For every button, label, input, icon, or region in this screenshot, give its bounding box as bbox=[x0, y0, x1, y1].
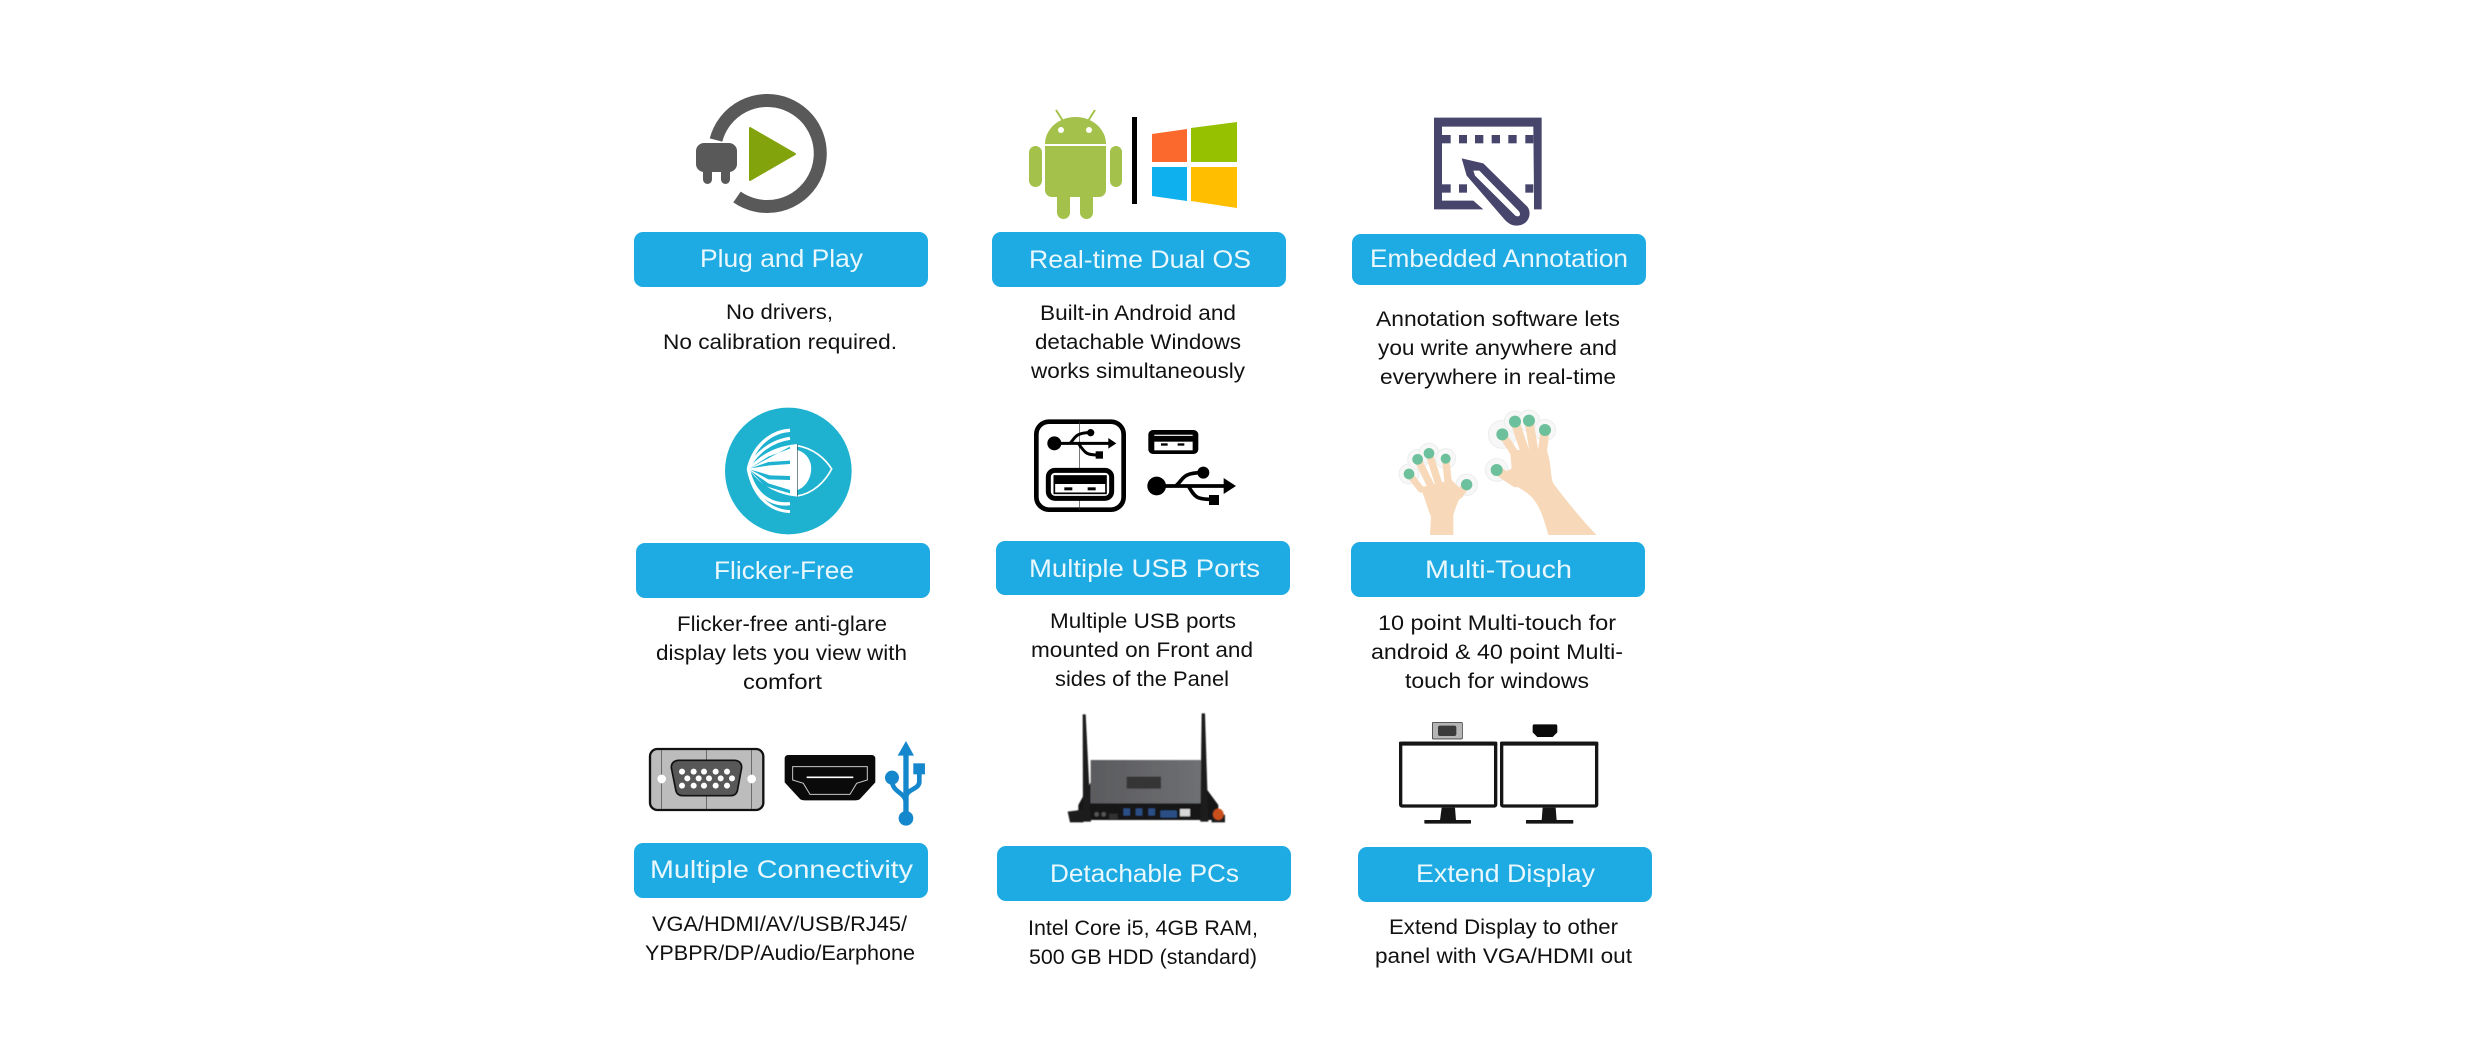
heading: Multi-Touch: Multi-Touch bbox=[1425, 556, 1572, 584]
heading: Flicker-Free bbox=[636, 543, 930, 598]
text: Annotation description: everywhere in real-time bbox=[1380, 366, 1616, 389]
heading: Multiple Connectivity bbox=[634, 843, 928, 898]
heading: Detachable PCs bbox=[997, 846, 1291, 901]
heading: Real-time Dual OS: Real-time Dual OS bbox=[1029, 246, 1251, 274]
icon: detachable PC module bbox=[1068, 713, 1225, 822]
text: Multi-Touch description: 10 point Multi-touch for bbox=[1378, 612, 1616, 635]
icon: VGA, HDMI and USB connectors bbox=[650, 741, 925, 826]
text: Annotation description bbox=[1376, 308, 1620, 389]
text: Extend Display description bbox=[1375, 916, 1632, 968]
heading: Plug and Play: Plug and Play bbox=[700, 245, 864, 273]
heading: Real-time Dual OS bbox=[992, 232, 1286, 287]
text: Detachable PC description: Intel Core i5, 4GB RAM, bbox=[1028, 917, 1258, 940]
text: Extend Display description: panel with VGA/HDMI out bbox=[1375, 945, 1632, 968]
icon: annotation film and pen bbox=[1434, 118, 1542, 226]
text: Plug and Play description: No drivers, bbox=[726, 301, 833, 324]
text: Annotation description: Annotation software lets bbox=[1376, 308, 1620, 331]
heading: Embedded Annotation bbox=[1352, 234, 1646, 285]
icon: two monitors with connectors bbox=[1399, 722, 1598, 824]
icon: plug and play bbox=[696, 100, 820, 206]
text: USB description: sides of the Panel bbox=[1055, 668, 1229, 691]
heading: Extend Display bbox=[1358, 847, 1652, 902]
panel: Multiple USB Ports bbox=[996, 421, 1290, 691]
text: Detachable PC description: 500 GB HDD (standard) bbox=[1029, 946, 1257, 969]
text: Dual OS description bbox=[1030, 302, 1246, 383]
heading: Extend Display: Extend Display bbox=[1416, 860, 1596, 888]
text: Dual OS description: Built-in Android and bbox=[1040, 302, 1236, 325]
text: Connectivity description bbox=[645, 913, 915, 965]
text: Detachable PC description bbox=[1028, 917, 1258, 969]
heading: Plug and Play bbox=[634, 232, 928, 287]
text: Dual OS description: works simultaneously bbox=[1030, 360, 1246, 383]
text: Flicker-Free description: display lets you view with bbox=[656, 642, 907, 665]
text: Annotation description: you write anywhere and bbox=[1378, 337, 1617, 360]
text: Flicker-Free description: comfort bbox=[743, 671, 822, 694]
icon: Android and Windows logos bbox=[1029, 110, 1237, 219]
icon: flicker-free eye bbox=[725, 408, 852, 534]
text: Multi-Touch description bbox=[1371, 612, 1623, 693]
icon: USB ports and symbols bbox=[1036, 421, 1236, 510]
text: Connectivity description: YPBPR/DP/Audio/Earphone bbox=[645, 942, 915, 965]
heading: Multiple USB Ports bbox=[996, 541, 1290, 595]
text: USB description bbox=[1031, 610, 1253, 691]
text: Flicker-Free description bbox=[656, 613, 907, 694]
heading: Multiple Connectivity: Multiple Connectivity bbox=[650, 856, 914, 884]
panel: Plug and Play bbox=[634, 100, 928, 354]
text: Plug and Play description bbox=[663, 301, 897, 354]
icon: hands with touch points bbox=[1399, 410, 1597, 535]
panel: Detachable PCs bbox=[997, 713, 1291, 969]
text: Connectivity description: VGA/HDMI/AV/USB/RJ45/ bbox=[652, 913, 907, 936]
heading: Embedded Annotation: Embedded Annotation bbox=[1370, 245, 1628, 273]
text: Plug and Play description: No calibration required. bbox=[663, 331, 897, 354]
heading: Flicker-Free: Flicker-Free bbox=[714, 557, 854, 585]
text: Flicker-Free description: Flicker-free anti-glare bbox=[677, 613, 887, 636]
panel: Embedded Annotation bbox=[1352, 118, 1646, 389]
text: Extend Display description: Extend Display to other bbox=[1389, 916, 1618, 939]
panel: Multiple Connectivity bbox=[634, 741, 928, 965]
text: USB description: mounted on Front and bbox=[1031, 639, 1253, 662]
panel: Flicker-Free bbox=[636, 408, 930, 694]
text: Multi-Touch description: android & 40 point Multi- bbox=[1371, 641, 1623, 664]
heading: Detachable PCs: Detachable PCs bbox=[1050, 860, 1239, 888]
heading: Multiple USB Ports: Multiple USB Ports bbox=[1029, 555, 1260, 583]
panel: Real-time Dual OS bbox=[992, 110, 1286, 383]
text: Multi-Touch description: touch for windows bbox=[1405, 670, 1589, 693]
text: USB description: Multiple USB ports bbox=[1050, 610, 1236, 633]
text: Dual OS description: detachable Windows bbox=[1035, 331, 1241, 354]
heading: Multi-Touch bbox=[1351, 542, 1645, 597]
panel: Extend Display bbox=[1358, 722, 1652, 968]
panel: Multi-Touch bbox=[1351, 410, 1645, 693]
